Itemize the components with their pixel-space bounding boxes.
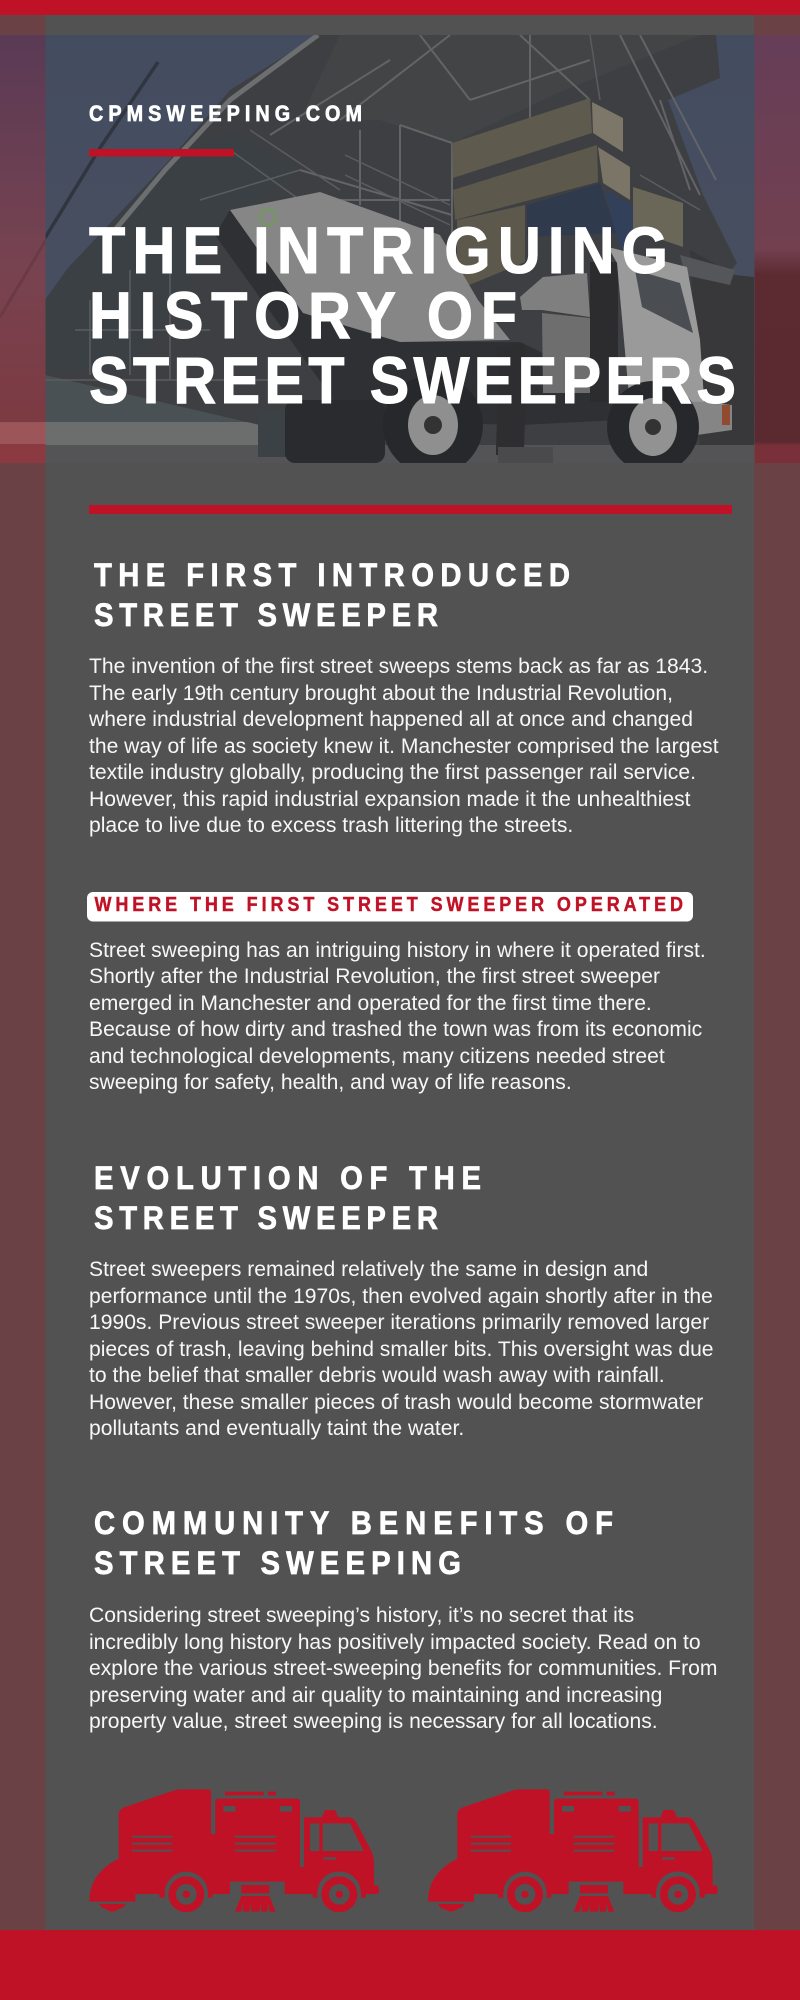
heading: evolution of the street sweeper: STREET SWEEPER xyxy=(94,1200,438,1236)
text block: first street sweeper: textile industry globally, producing the first passenger rail service. xyxy=(89,761,696,784)
heading: evolution of the street sweeper xyxy=(94,1160,481,1236)
text block: evolution: However, these smaller pieces of trash would become stormwater xyxy=(89,1391,703,1414)
text block: first street sweeper: place to live due to excess trash littering the streets. xyxy=(89,814,573,837)
text block: where it operated: and technological developments, many citizens needed street xyxy=(89,1045,665,1068)
text block: community benefits: explore the various street-sweeping benefits for communities. From xyxy=(89,1657,717,1680)
text block: where it operated: emerged in Manchester and operated for the first time there. xyxy=(89,992,652,1015)
text block: where it operated: Shortly after the Industrial Revolution, the first street sweeper xyxy=(89,965,660,988)
text block: community benefits: incredibly long history has positively impacted society. Read on to xyxy=(89,1631,701,1654)
text block: evolution xyxy=(89,1258,714,1440)
text block: first street sweeper: the way of life as society knew it. Manchester comprised the largest xyxy=(89,735,719,758)
heading: the first introduced street sweeper xyxy=(94,557,570,633)
text block: first street sweeper: The invention of the first street sweeps stems back as far as 1843. xyxy=(89,655,708,678)
title: THE INTRIGUING xyxy=(89,214,668,288)
heading: community benefits of street sweeping: STREET SWEEPING xyxy=(94,1545,461,1581)
text block: evolution: 1990s. Previous street sweeper iterations primarily removed larger xyxy=(89,1311,709,1334)
heading: community benefits of street sweeping: COMMUNITY BENEFITS OF xyxy=(94,1505,613,1541)
text block: evolution: to the belief that smaller debris would wash away with rainfall. xyxy=(89,1364,665,1387)
text block: evolution: pieces of trash, leaving behind smaller bits. This oversight was due xyxy=(89,1338,714,1361)
text block: community benefits: preserving water and air quality to maintaining and increasing xyxy=(89,1684,662,1707)
text block: evolution: Street sweepers remained relatively the same in design and xyxy=(89,1258,648,1281)
top red bar xyxy=(0,0,800,15)
title xyxy=(89,214,736,418)
title: HISTORY OF xyxy=(89,279,517,353)
text block: community benefits: property value, street sweeping is necessary for all locations. xyxy=(89,1710,658,1733)
hero photo: sweeper truck and stadium xyxy=(0,35,800,475)
text block: first street sweeper: However, this rapid industrial expansion made it the unhealthiest xyxy=(89,788,691,811)
text block: where it operated: Street sweeping has an intriguing history in where it operated first. xyxy=(89,939,706,962)
long red divider xyxy=(89,505,732,514)
text block: community benefits xyxy=(89,1604,717,1733)
title: STREET SWEEPERS xyxy=(89,344,736,418)
text block: first street sweeper: The early 19th century brought about the Industrial Revolution, xyxy=(89,682,673,705)
website label: CPMSWEEPING.COM xyxy=(89,102,362,126)
short red accent rule xyxy=(89,149,234,156)
text block: where it operated: sweeping for safety, health, and way of life reasons. xyxy=(89,1071,572,1094)
heading: evolution of the street sweeper: EVOLUTION OF THE xyxy=(94,1160,481,1196)
heading pill: where the first street sweeper operated: WHERE THE FIRST STREET SWEEPER OPERATED xyxy=(94,894,683,916)
text block: evolution: performance until the 1970s, then evolved again shortly after in the xyxy=(89,1285,713,1308)
bottom red band xyxy=(0,1930,800,2000)
icon: street sweeper truck left xyxy=(89,1789,379,1915)
text block: first street sweeper: where industrial development happened all at once and changed xyxy=(89,708,693,731)
icon: street sweeper truck right xyxy=(428,1789,718,1915)
text block: where it operated xyxy=(89,939,706,1094)
heading: the first introduced street sweeper: STREET SWEEPER xyxy=(94,597,438,633)
text block: community benefits: Considering street sweeping’s history, it’s no secret that its xyxy=(89,1604,634,1627)
text block: where it operated: Because of how dirty and trashed the town was from its economic xyxy=(89,1018,702,1041)
heading: the first introduced street sweeper: THE FIRST INTRODUCED xyxy=(94,557,570,593)
text block: first street sweeper xyxy=(89,655,719,837)
heading: community benefits of street sweeping xyxy=(94,1505,613,1581)
text block: evolution: pollutants and eventually taint the water. xyxy=(89,1417,464,1440)
